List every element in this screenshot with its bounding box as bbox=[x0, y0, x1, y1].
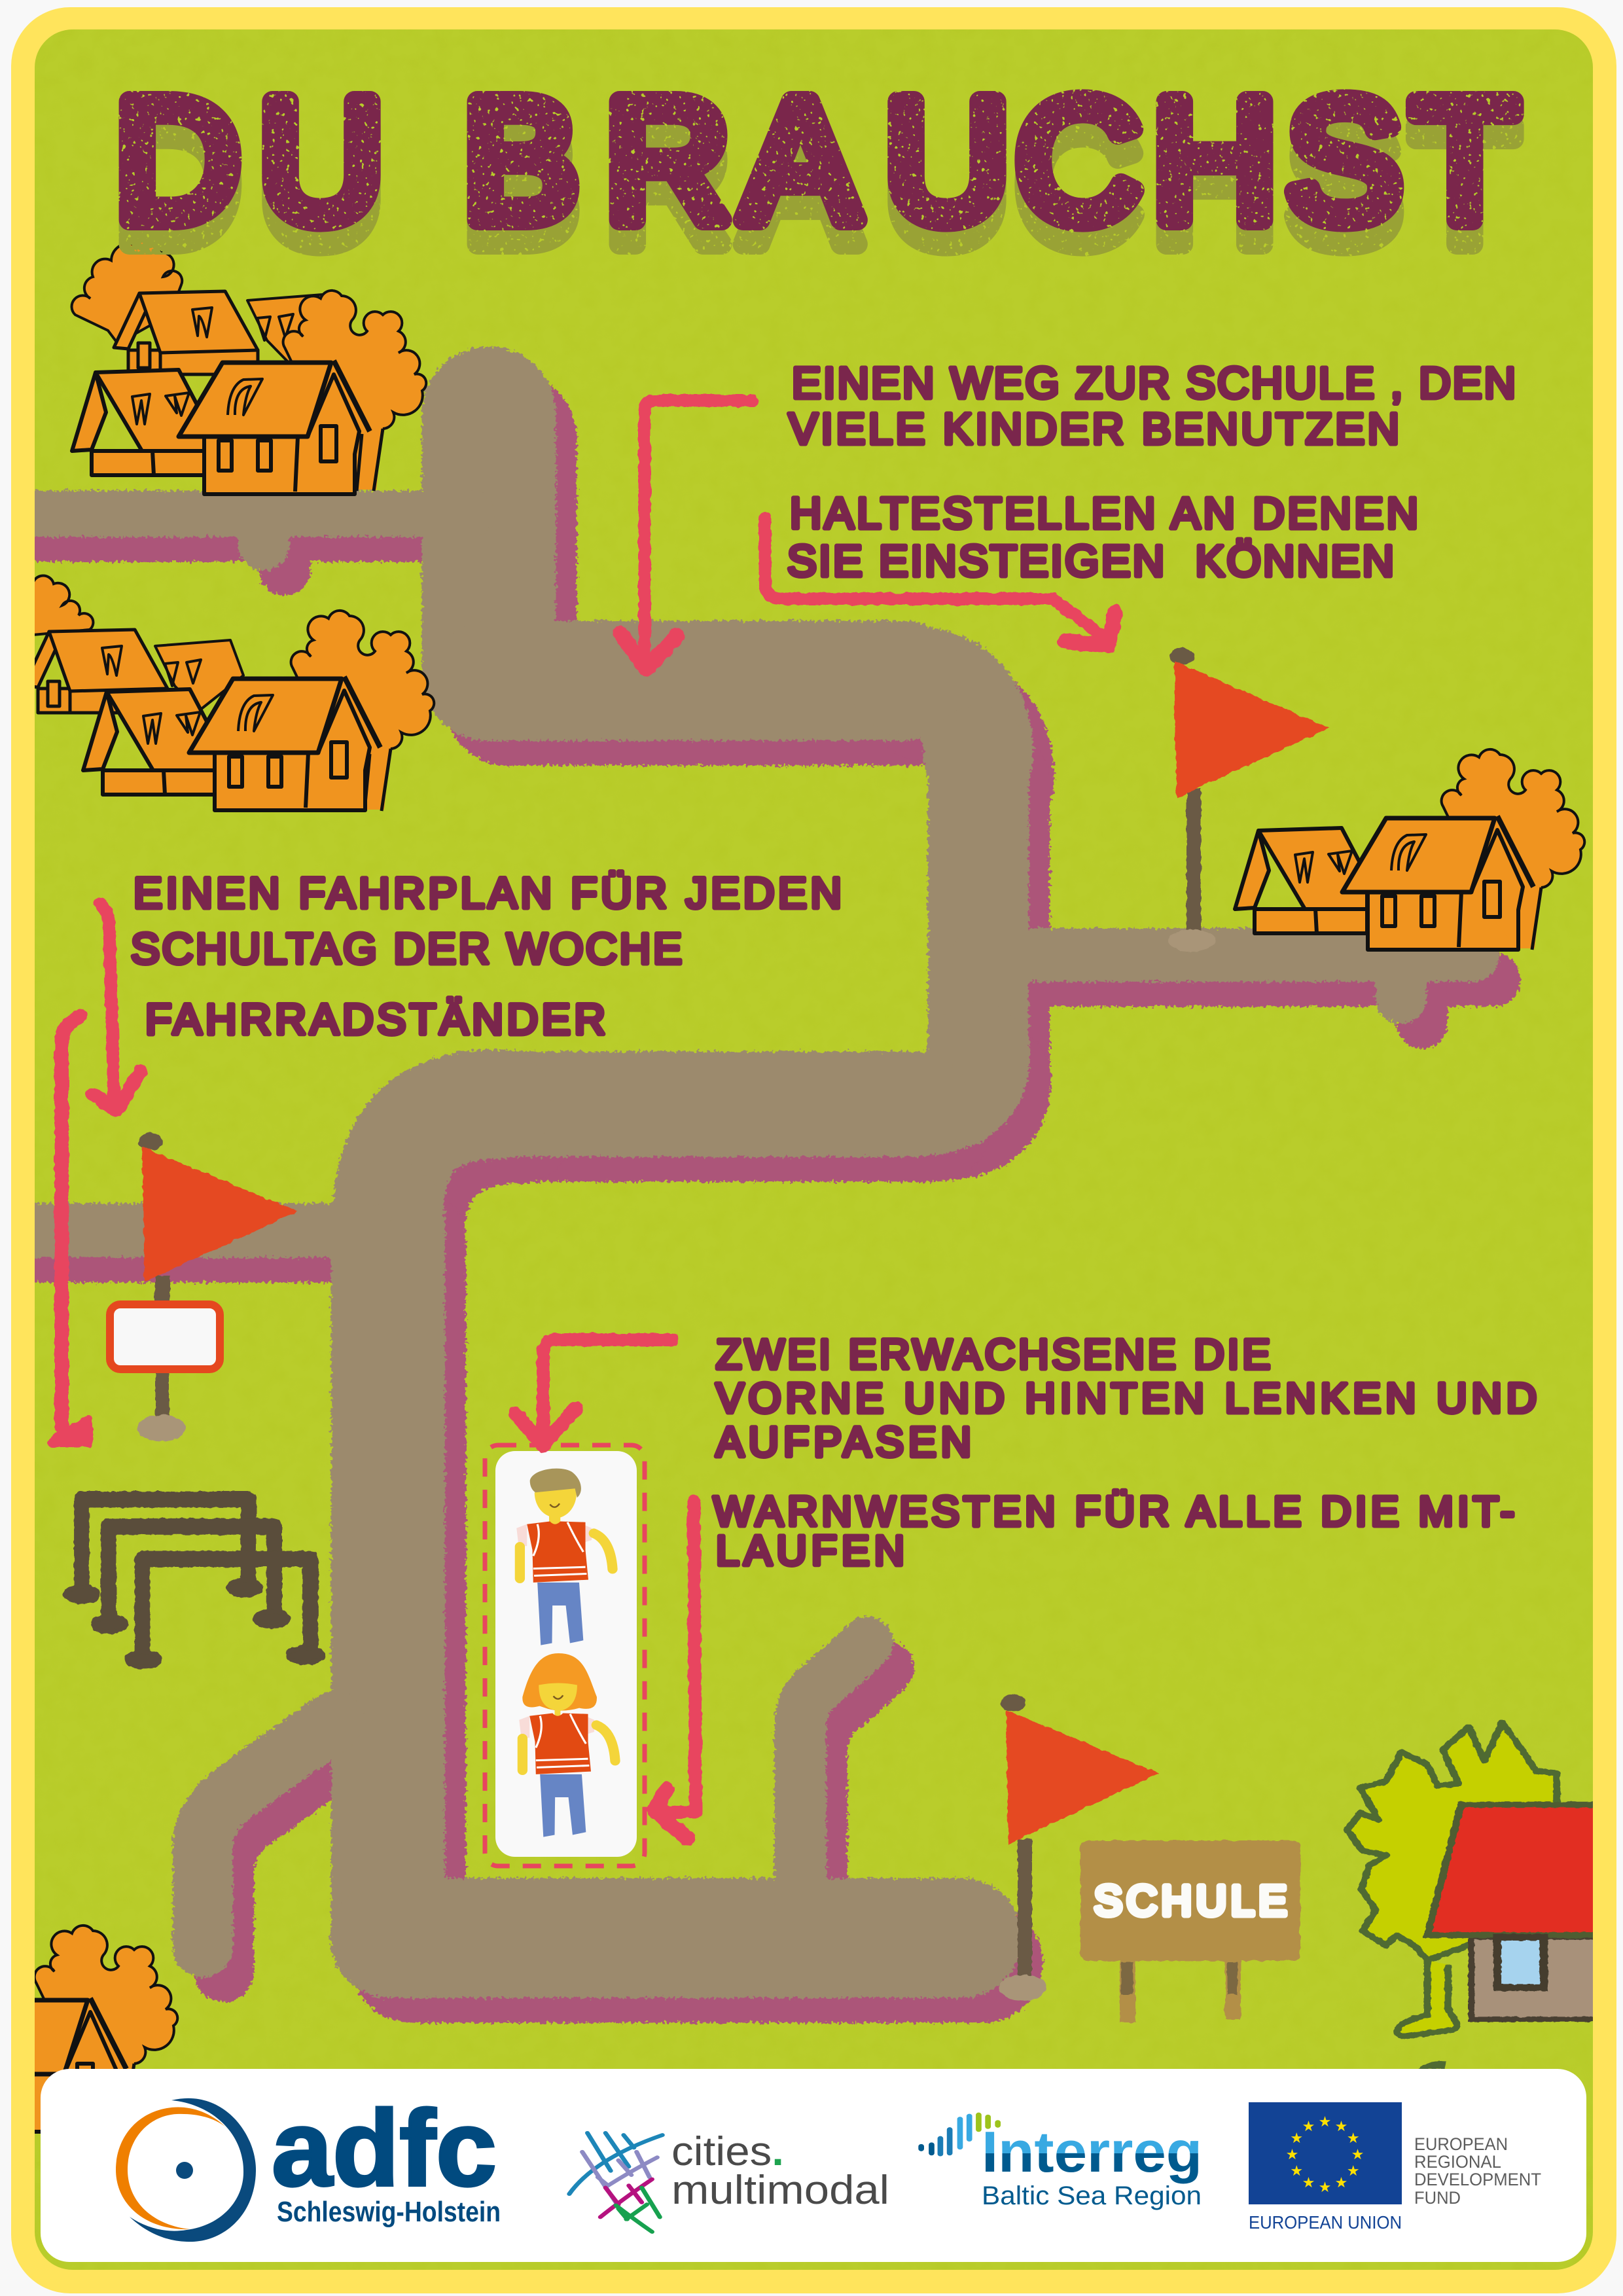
white card bbox=[495, 1451, 637, 1857]
signal bars bbox=[921, 2115, 998, 2154]
school sign: SCHULE bbox=[1094, 1877, 1287, 1924]
EU flag: ★ bbox=[1347, 2162, 1360, 2179]
EU flag: ★ bbox=[1351, 2146, 1364, 2162]
text: two adults: ZWEI ERWACHSENE DIE bbox=[716, 1331, 1270, 1378]
school sign bbox=[1080, 1840, 1300, 2022]
logo: adfc: adfc bbox=[272, 2088, 497, 2208]
house cluster bottom left bbox=[0, 1926, 177, 2132]
timetable sign bbox=[110, 1304, 220, 1369]
arrows bbox=[51, 401, 1115, 1838]
house cluster right bbox=[1235, 749, 1584, 950]
flag: left stop with timetable sign bbox=[137, 1133, 298, 1441]
title text: DU bbox=[115, 64, 383, 257]
EU flag: ★ bbox=[1319, 2179, 1331, 2195]
dashed outline bbox=[485, 1445, 645, 1866]
arrow: to adults bbox=[516, 1340, 673, 1445]
logo: European Union: REGIONAL bbox=[1414, 2152, 1501, 2172]
text: timetable: SCHULTAG DER WOCHE bbox=[131, 924, 682, 973]
title shadow: DU bbox=[115, 88, 383, 281]
text: two adults bbox=[716, 1331, 1537, 1465]
arrow: to road bbox=[620, 401, 753, 669]
logo: European Union: EUROPEAN UNION bbox=[1249, 2212, 1402, 2233]
network icon bbox=[569, 2133, 662, 2232]
logo: Interreg bbox=[921, 2115, 1202, 2210]
logo: adfc bbox=[116, 2088, 501, 2242]
text: stops: SIE EINSTEIGEN KÖNNEN bbox=[787, 537, 1394, 586]
EU flag: ★ bbox=[1335, 2118, 1347, 2134]
text: two adults: AUFPASEN bbox=[716, 1418, 971, 1465]
text: safety vests: WARNWESTEN FÜR ALLE DIE MIT- bbox=[713, 1488, 1514, 1535]
figure: adult with vest bbox=[516, 1469, 613, 1645]
text: safe route: EINEN WEG ZUR SCHULE , DEN bbox=[792, 359, 1516, 408]
text: stops bbox=[787, 489, 1418, 586]
text: two adults: VORNE UND HINTEN LENKEN UND bbox=[716, 1374, 1537, 1422]
logo: cities.multimodal bbox=[569, 2129, 889, 2232]
arrow: to flag top right bbox=[765, 518, 1115, 645]
logo: European Union: FUND bbox=[1414, 2188, 1461, 2208]
school building and tree bbox=[1347, 1723, 1623, 2069]
text: safe route bbox=[789, 359, 1516, 454]
adfc wheel bbox=[116, 2098, 256, 2242]
arrow: to bike stands bbox=[51, 1016, 89, 1443]
EU flag: ★ bbox=[1290, 2130, 1303, 2146]
title bbox=[115, 64, 1518, 281]
logo: Interreg: Interreg bbox=[982, 2119, 1202, 2184]
arrow: to left flag bbox=[93, 903, 140, 1110]
bike stands bbox=[65, 1499, 323, 1667]
text: stops: HALTESTELLEN AN DENEN bbox=[790, 489, 1418, 538]
EU flag: ★ bbox=[1347, 2130, 1360, 2146]
logo: European Union: EUROPEAN bbox=[1414, 2134, 1508, 2154]
title shadow: BRAUCHST bbox=[463, 88, 1518, 281]
EU flag bbox=[1249, 2102, 1402, 2204]
EU flag: ★ bbox=[1319, 2113, 1331, 2130]
arrow: to vests bbox=[654, 1501, 696, 1838]
EU flag: ★ bbox=[1290, 2162, 1303, 2179]
house cluster middle left bbox=[24, 576, 434, 811]
text: bike racks: FAHRRADSTÄNDER bbox=[145, 995, 605, 1043]
figure: child with vest bbox=[519, 1653, 615, 1837]
text: safety vests bbox=[713, 1488, 1514, 1574]
text: safe route: VIELE KINDER BENUTZEN bbox=[789, 404, 1399, 454]
walking bus panel bbox=[485, 1445, 645, 1866]
EU flag: ★ bbox=[1286, 2146, 1298, 2162]
text: timetable bbox=[131, 869, 842, 973]
EU flag: ★ bbox=[1335, 2174, 1347, 2191]
house cluster top left bbox=[72, 242, 426, 494]
EU flag: ★ bbox=[1302, 2118, 1315, 2134]
text: timetable: EINEN FAHRPLAN FÜR JEDEN bbox=[134, 869, 842, 917]
logo: cities.multimodal: cities. bbox=[671, 2129, 784, 2174]
footer logo bar bbox=[41, 2069, 1586, 2262]
logo: Interreg: Baltic Sea Region bbox=[982, 2181, 1202, 2210]
flag: top right stop bbox=[1168, 648, 1329, 952]
flag: school stop bbox=[999, 1695, 1159, 2001]
logo: cities.multimodal: multimodal bbox=[671, 2168, 889, 2213]
text: safety vests: LAUFEN bbox=[716, 1527, 904, 1574]
logo: adfc: Schleswig-Holstein bbox=[277, 2196, 501, 2228]
logo: European Union: DEVELOPMENT bbox=[1414, 2170, 1541, 2189]
logo: European Union bbox=[1249, 2102, 1541, 2233]
EU flag: ★ bbox=[1302, 2174, 1315, 2191]
title text: BRAUCHST bbox=[463, 64, 1518, 257]
road network bbox=[0, 414, 1493, 1972]
